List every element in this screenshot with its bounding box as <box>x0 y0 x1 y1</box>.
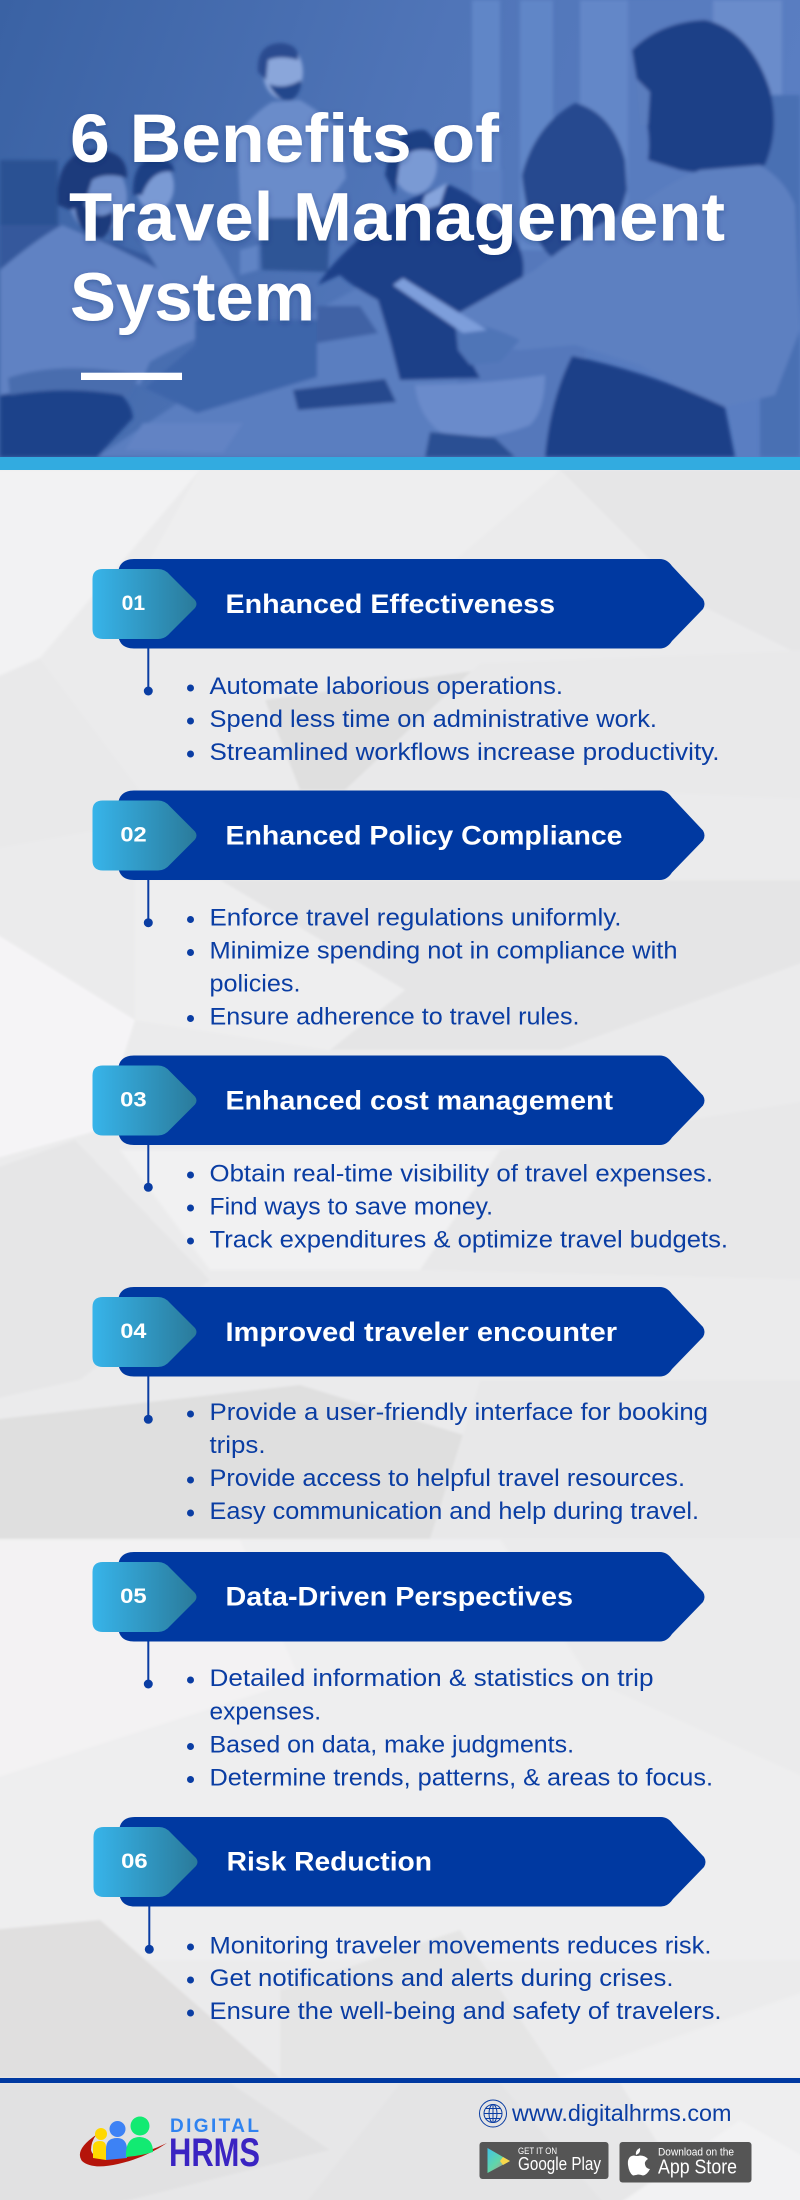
number badge 04: 04 <box>120 1320 147 1343</box>
bullets 4: Provide a user-friendly interface for booking <box>210 1399 708 1426</box>
bullets 6: Ensure the well-being and safety of travelers. <box>210 1998 722 2025</box>
heading 1: Enhanced Effectiveness <box>226 589 555 619</box>
connector 2 <box>144 876 153 927</box>
connector 3 <box>144 1141 153 1192</box>
section 5: Data-Driven Perspectives <box>92 1552 713 1792</box>
section 6: Risk Reduction <box>94 1817 722 2025</box>
section 1: Enhanced Effectiveness <box>92 559 720 766</box>
section 3: Enhanced cost management <box>92 1056 728 1253</box>
bullets 3: Find ways to save money. <box>210 1193 493 1220</box>
banner 3 <box>118 1056 704 1145</box>
white chair <box>415 375 545 437</box>
connector 4 <box>144 1372 153 1424</box>
banner 4 <box>118 1287 704 1376</box>
bullets 6 <box>187 1932 722 2025</box>
banner 5 <box>118 1552 704 1642</box>
Google Play badge <box>480 2142 608 2179</box>
icon: play triangle <box>488 2148 510 2173</box>
window columns <box>472 0 800 457</box>
bullets 3: Track expenditures & optimize travel budgets. <box>210 1226 728 1253</box>
footer rule <box>0 2078 800 2083</box>
number badge 02: 02 <box>120 824 147 846</box>
bullets 4: Provide access to helpful travel resources. <box>210 1465 685 1492</box>
number badge 01: 01 <box>122 592 145 615</box>
heading 6: Risk Reduction <box>227 1847 432 1877</box>
App Store badge: App Store <box>658 2156 737 2178</box>
banner 6 <box>119 1817 706 1906</box>
open laptop <box>145 320 317 413</box>
bullets 2: policies. <box>210 971 300 998</box>
App Store badge <box>620 2142 752 2182</box>
left seated man <box>0 150 205 457</box>
icon: globe <box>480 2100 506 2127</box>
bullets 2 <box>187 905 678 1031</box>
logo figures <box>93 2116 153 2160</box>
bullets 5: Determine trends, patterns, & areas to focus. <box>210 1764 713 1792</box>
section 4: Improved traveler encounter <box>92 1287 708 1525</box>
bullets 5: Based on data, make judgments. <box>210 1732 574 1759</box>
background: low-poly grey texture <box>0 470 800 2200</box>
floor and sofa <box>0 160 585 457</box>
heading 3: Enhanced cost management <box>226 1086 613 1116</box>
bullets 1 <box>187 673 720 766</box>
number badge 03: 03 <box>120 1088 147 1112</box>
banner 1 <box>118 559 704 648</box>
notebook <box>140 422 150 432</box>
App Store text: Download on the <box>658 2147 734 2159</box>
heading 4: Improved traveler encounter <box>226 1317 618 1347</box>
bullets 4 <box>187 1399 708 1525</box>
meeting table <box>97 287 454 457</box>
bullets 3 <box>187 1160 728 1253</box>
bullets 2: Minimize spending not in compliance with <box>210 938 678 965</box>
woman in foreground <box>455 20 800 457</box>
bullets 5: expenses. <box>210 1698 321 1726</box>
banner 2 <box>118 790 704 880</box>
tablet <box>293 379 396 410</box>
bullets 1: Spend less time on administrative work. <box>210 706 657 733</box>
hero title <box>69 100 725 336</box>
plant <box>520 101 628 258</box>
website url: www.digitalhrms.com <box>511 2100 732 2126</box>
number badge 06: 06 <box>121 1850 148 1873</box>
heading 2: Enhanced Policy Compliance <box>226 820 622 850</box>
far laptop <box>317 306 378 343</box>
seated man in dark sweater <box>318 130 524 380</box>
footer logo: Digital HRMS <box>80 2116 260 2175</box>
hero title: 6 Benefits of <box>70 100 500 177</box>
logo wordmark HRMS: HRMS <box>169 2131 260 2175</box>
chair legs <box>425 432 515 457</box>
paper sheet <box>393 278 487 333</box>
number badge 04 <box>92 1297 196 1367</box>
hero title: Travel Management <box>69 178 725 256</box>
bullets 4: Easy communication and help during travel. <box>210 1498 699 1525</box>
connector 6 <box>145 1902 154 1954</box>
number badge 03 <box>92 1066 196 1136</box>
bullets 2: Ensure adherence to travel rules. <box>210 1004 580 1031</box>
bullets 4: trips. <box>210 1432 266 1459</box>
number badge 05 <box>92 1562 196 1632</box>
Google Play text: GET IT ON <box>518 2146 557 2156</box>
hero photo: blue-toned office meeting <box>0 0 800 457</box>
bullets 5: Detailed information & statistics on trip <box>210 1665 654 1692</box>
bullets 1: Streamlined workflows increase productivity. <box>210 739 720 766</box>
standing man <box>237 43 346 275</box>
number badge 05: 05 <box>120 1585 147 1608</box>
woman at table <box>133 158 238 292</box>
heading 5: Data-Driven Perspectives <box>226 1582 573 1612</box>
Google Play badge: Google Play <box>518 2154 601 2174</box>
bullets 2: Enforce travel regulations uniformly. <box>210 905 622 932</box>
connector 5 <box>144 1637 153 1688</box>
number badge 01 <box>92 569 196 639</box>
logo swoosh <box>80 2135 167 2166</box>
hero title: System <box>70 258 315 336</box>
logo wordmark DIGITAL: DIGITAL <box>170 2116 259 2137</box>
number badge 06 <box>94 1827 198 1897</box>
connector 1 <box>144 645 153 696</box>
bullets 1: Automate laborious operations. <box>210 673 563 700</box>
number badge 02 <box>92 800 196 870</box>
hero accent bar <box>0 457 800 470</box>
website link <box>480 2100 732 2127</box>
title underline <box>81 373 182 380</box>
icon: apple <box>628 2148 650 2176</box>
bullets 3: Obtain real-time visibility of travel expenses. <box>210 1160 713 1187</box>
bullets 5 <box>187 1665 713 1792</box>
section 2: Enhanced Policy Compliance <box>92 790 704 1031</box>
bullets 6: Get notifications and alerts during crises. <box>210 1965 674 1992</box>
bullets 6: Monitoring traveler movements reduces risk. <box>210 1932 712 1959</box>
